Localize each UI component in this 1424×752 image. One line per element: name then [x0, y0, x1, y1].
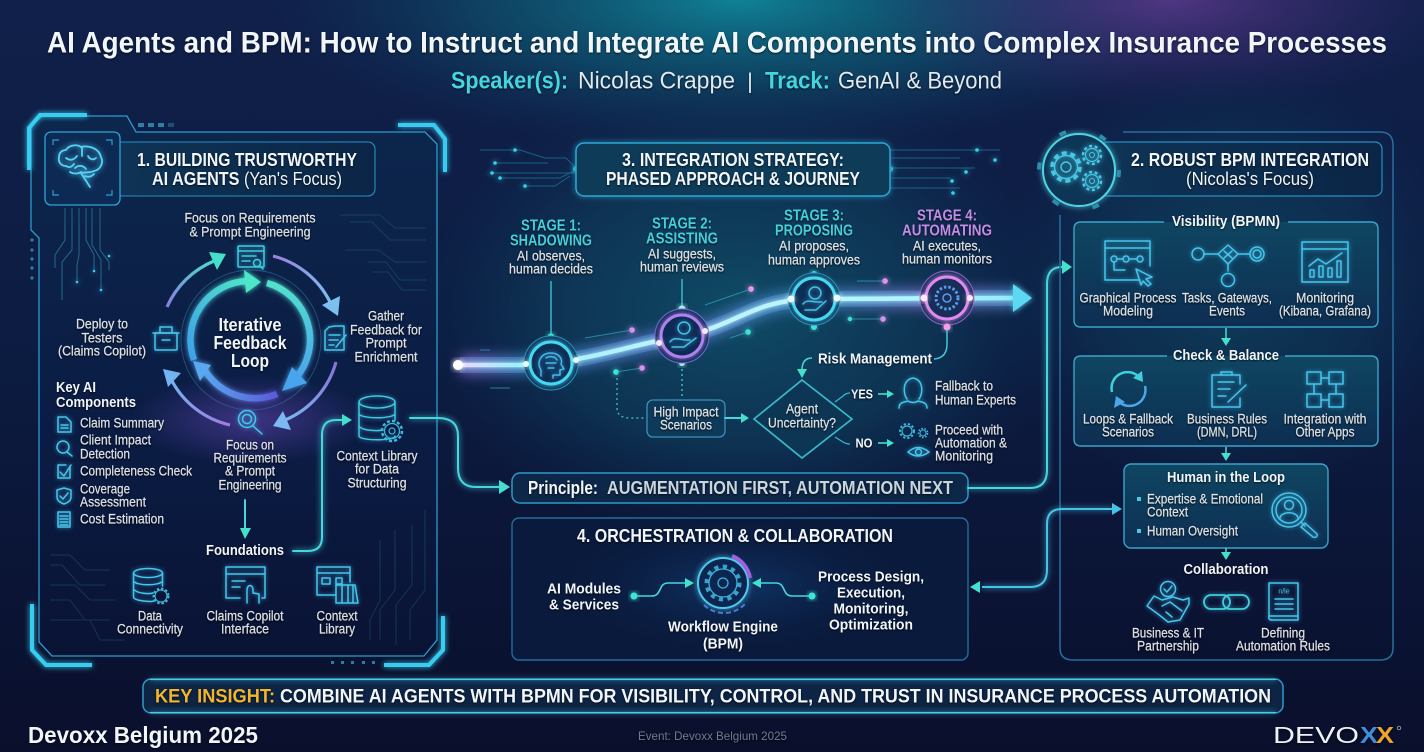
- stage 4: automating: AUTOMATING: [902, 222, 992, 240]
- text: graphical process modeling: Graphical Process: [1080, 290, 1177, 306]
- card: visibility BPMN: Visibility (BPMN): [1172, 214, 1280, 230]
- subtitle: speaker and track: Speaker(s):: [451, 68, 568, 94]
- card: check and balance: Check & Balance: [1173, 348, 1279, 364]
- panel 3 title box: PHASED APPROACH & JOURNEY: [606, 169, 860, 189]
- text: defining automation rules: [1236, 626, 1330, 654]
- text: tasks gateways events: [1182, 290, 1272, 318]
- item: coverage assessment: [57, 482, 146, 510]
- label: AI modules: & Services: [549, 596, 619, 614]
- text: loops: Scenarios: [1102, 424, 1154, 440]
- foundation: data connectivity: [117, 568, 183, 636]
- icon: gears: [1039, 130, 1119, 210]
- cycle step: focus on requirements bottom: [214, 410, 287, 492]
- panel 3: integration strategy: [453, 143, 1032, 464]
- panel 4: orchestration and collaboration: 4. ORCHESTRATION & COLLABORATION: [577, 526, 893, 546]
- cycle step: gather feedback: Feedback for: [350, 322, 422, 338]
- outer loop arrows: [163, 252, 340, 430]
- arrow: process design to engine: [752, 578, 816, 600]
- icon: rules book: n/le: [1278, 588, 1290, 596]
- foundation: data connectivity: Data: [138, 608, 162, 624]
- cycle step: focus on requirements top: & Prompt Engineering: [190, 224, 310, 240]
- label: iterative feedback loop: [214, 315, 287, 371]
- text: integration: Other Apps: [1296, 424, 1355, 440]
- arrow: human to collaboration: [1221, 548, 1231, 560]
- journey track arrow: [453, 278, 1032, 388]
- logo: Devoxx: X: [1376, 722, 1395, 748]
- cycle step: deploy to testers: Testers: [82, 330, 123, 346]
- cycle step: deploy to testers: (Claims Copilot): [58, 344, 146, 358]
- footer: conference name: Devoxx Belgium 2025: [28, 722, 258, 748]
- arrow: AI modules to engine: [630, 578, 694, 600]
- text: integration: Integration with: [1284, 412, 1366, 426]
- panel 2: robust BPM integration: [1039, 130, 1393, 660]
- card: human in the loop: Human in the Loop: [1167, 470, 1285, 486]
- text: defining automation rules: Defining: [1261, 626, 1305, 640]
- panel 3 title box: 3. INTEGRATION STRATEGY:: [622, 150, 844, 170]
- logo: Devoxx: DEVO: [1273, 722, 1359, 748]
- subtitle: speaker and track: Nicolas Crappe: [578, 68, 735, 94]
- foundation: context library: Library: [319, 622, 355, 636]
- icon: integration: [1307, 372, 1343, 407]
- high impact scenarios: [617, 373, 749, 437]
- cycle step: focus on requirements bottom: & Prompt: [225, 464, 275, 478]
- branch: no to automation: Monitoring: [935, 448, 993, 464]
- stage 4: automating: human monitors: [902, 252, 992, 266]
- icon: monitoring dashboard: [1302, 242, 1348, 282]
- label: process design: Process Design,: [818, 568, 924, 586]
- foundations: Foundations: [206, 543, 284, 559]
- decision: agent uncertainty: Agent: [786, 402, 818, 416]
- branch: yes to fallback: YES: [851, 386, 873, 402]
- key AI components list: Key AI: [56, 380, 96, 396]
- arrow: foundations to context library: [293, 414, 352, 551]
- foundation: context library: [316, 567, 358, 636]
- icon: process modeling: [1105, 241, 1152, 286]
- text: business and IT partnership: Business & IT: [1132, 626, 1204, 640]
- key insight banner: [143, 679, 1283, 713]
- panel 1: building trustworthy AI agents: [29, 115, 445, 665]
- foundations: [117, 543, 358, 636]
- decision: agent uncertainty: [754, 380, 852, 458]
- text: graphical process modeling: [1080, 290, 1177, 318]
- item: client impact detection: Client Impact: [80, 432, 151, 448]
- text: business rules: (DMN, DRL): [1197, 424, 1257, 440]
- stage 2: assisting: human reviews: [640, 260, 724, 274]
- stage 4: automating: STAGE 4:: [917, 208, 977, 224]
- icon: rules book: [1269, 583, 1298, 620]
- stage 1: shadowing: AI observes,: [517, 248, 585, 264]
- context library for data structuring: [336, 396, 418, 490]
- label: AI modules: AI Modules: [547, 580, 621, 598]
- cycle step: focus on requirements bottom: Requirements: [214, 450, 287, 466]
- label: process design: Monitoring,: [834, 600, 908, 618]
- icon: workflow engine gear: [698, 556, 750, 613]
- stage 2: assisting: [640, 216, 724, 396]
- text: graphical process modeling: Modeling: [1103, 304, 1153, 318]
- footer: event caption: Event: Devoxx Belgium 2025: [638, 729, 787, 743]
- panel 2 title box: (Nicolas's Focus): [1186, 169, 1314, 189]
- circuit decoration: [480, 148, 1000, 195]
- label: iterative feedback loop: Iterative: [218, 315, 282, 335]
- label: iterative feedback loop: Loop: [231, 351, 269, 371]
- branch: no to automation: [835, 422, 1007, 464]
- label: process design: Optimization: [829, 616, 913, 634]
- label: process design: Execution,: [837, 584, 905, 602]
- arrow: visibility to check: [1221, 328, 1231, 346]
- stage 1: shadowing: [509, 218, 593, 390]
- connector: principle to BPM visibility: [968, 260, 1072, 488]
- text: monitoring: Monitoring: [1296, 290, 1354, 306]
- stage 2: assisting: STAGE 2:: [652, 216, 712, 232]
- stage 3: proposing: [768, 208, 860, 330]
- item: client impact detection: Detection: [80, 446, 130, 462]
- logo: Devoxx: [1273, 722, 1401, 748]
- cycle step: focus on requirements top: Focus on Requirements: [184, 210, 316, 226]
- connector: context library to principle: [410, 418, 510, 494]
- subtitle: speaker and track: Track:: [765, 68, 830, 94]
- text: business and IT partnership: Partnership: [1137, 638, 1199, 654]
- label: workflow engine: Workflow Engine: [668, 618, 778, 636]
- card: human in the loop: Context: [1147, 504, 1188, 520]
- icon: tasks gateways events: [1192, 245, 1264, 286]
- item: claim summary: Claim Summary: [80, 416, 164, 430]
- principle banner: AUGMENTATION FIRST, AUTOMATION NEXT: [607, 478, 953, 498]
- principle banner: Principle:: [528, 478, 598, 498]
- panel 1 circuit decoration: [50, 208, 426, 645]
- key AI components list: [56, 380, 192, 527]
- item: coverage assessment: Coverage: [80, 482, 130, 496]
- item: completeness check: Completeness Check: [80, 464, 192, 478]
- foundation: claims copilot interface: Claims Copilot: [206, 608, 284, 624]
- text: loops: Loops & Fallback: [1083, 412, 1173, 426]
- branch: no to automation: Automation &: [935, 436, 1007, 450]
- branch: yes to fallback: Human Experts: [935, 392, 1016, 408]
- foundation: context library: Context: [316, 608, 358, 624]
- card: check and balance: [1074, 348, 1378, 446]
- stage 1: shadowing: STAGE 1:: [521, 218, 581, 234]
- stage 3: proposing: human approves: [768, 252, 860, 268]
- panel 2 title box: 2. ROBUST BPM INTEGRATION: [1131, 150, 1369, 170]
- cycle step: gather feedback: Enrichment: [354, 350, 418, 364]
- label: iterative feedback loop: Feedback: [214, 333, 287, 353]
- inner loop arrows: [190, 270, 310, 398]
- panel 1 title box: [115, 142, 375, 196]
- item: cost estimation: [58, 512, 164, 527]
- icon: magnifier person: [1272, 493, 1317, 537]
- cycle step: gather feedback: [325, 308, 422, 364]
- decision: agent uncertainty: Uncertainty?: [768, 416, 836, 430]
- foundation: claims copilot interface: [206, 567, 284, 636]
- arrow: down to foundations: [240, 500, 251, 539]
- high impact scenarios: Scenarios: [660, 418, 712, 432]
- stage 1: shadowing: SHADOWING: [510, 232, 592, 250]
- arrow: check to human: [1221, 447, 1231, 461]
- cycle step: deploy to testers: Deploy to: [76, 316, 128, 332]
- branch: yes to fallback: [835, 378, 1016, 408]
- icon: handshake: [1147, 582, 1189, 622]
- branch: no to automation: Proceed with: [935, 422, 1003, 438]
- key insight banner: KEY INSIGHT:: [155, 686, 275, 708]
- text: business rules: Business Rules: [1187, 412, 1267, 426]
- cycle step: focus on requirements bottom: Engineering: [218, 478, 282, 492]
- key insight banner: COMBINE AI AGENTS WITH BPMN FOR VISIBILITY, CONTROL, AND TRUST IN INSURANCE PROCESS AUTOMATION: [280, 686, 1271, 708]
- icon: clipboard rules: [1212, 372, 1246, 407]
- foundation: claims copilot interface: Interface: [221, 622, 269, 636]
- cycle step: deploy to testers: [58, 316, 179, 358]
- stage 2: assisting: AI suggests,: [648, 246, 716, 262]
- branch: no to automation: NO: [856, 436, 872, 450]
- high impact scenarios: High Impact: [654, 404, 719, 420]
- text: business rules: [1187, 412, 1267, 440]
- stage 4: automating: [902, 208, 992, 330]
- subtitle: speaker and track: GenAI & Beyond: [838, 68, 1002, 94]
- icon: link: [1204, 595, 1249, 609]
- risk management: [797, 330, 947, 378]
- stage 3: proposing: PROPOSING: [775, 222, 853, 240]
- risk management: Risk Management: [818, 350, 932, 368]
- card: human in the loop: Expertise & Emotional: [1147, 492, 1263, 506]
- logo: Devoxx: X: [1360, 722, 1379, 748]
- context library for data structuring: for Data: [355, 462, 399, 476]
- text: business and IT partnership: [1132, 626, 1204, 654]
- label: workflow engine: [668, 618, 778, 652]
- card: human in the loop: [1124, 464, 1328, 548]
- panel 3 title box: [576, 143, 890, 196]
- text: tasks gateways events: Tasks, Gateways,: [1182, 290, 1272, 306]
- stage 1: shadowing: human decides: [509, 262, 593, 276]
- foundation: data connectivity: Connectivity: [117, 622, 183, 636]
- text: tasks gateways events: Events: [1209, 304, 1245, 318]
- text: defining automation rules: Automation Rules: [1236, 638, 1330, 654]
- label: workflow engine: (BPM): [703, 636, 743, 652]
- label: AI modules: [547, 580, 621, 614]
- panel 1 title box: AI AGENTS (Yan's Focus): [152, 169, 342, 189]
- chart: iterative feedback loop cycle: [163, 252, 340, 430]
- icon: brain: [45, 132, 120, 205]
- stage 2: assisting: ASSISTING: [646, 230, 718, 248]
- context library for data structuring: Structuring: [348, 476, 406, 490]
- subtitle: speaker and track: |: [747, 68, 753, 94]
- card: human in the loop: Human Oversight: [1147, 524, 1238, 538]
- text: monitoring: (Kibana, Grafana): [1279, 304, 1371, 318]
- panel 4: orchestration and collaboration: [512, 513, 968, 660]
- branch: yes to fallback: Fallback to: [935, 378, 993, 394]
- cycle step: gather feedback: Gather: [368, 308, 404, 324]
- key AI components list: Components: [56, 395, 136, 411]
- panel 1 title box: 1. BUILDING TRUSTWORTHY: [137, 150, 357, 170]
- context library for data structuring: Context Library: [336, 448, 418, 464]
- item: cost estimation: Cost Estimation: [80, 512, 164, 526]
- stage 3: proposing: STAGE 3:: [784, 208, 844, 224]
- subtitle: speaker and track: [451, 68, 1002, 94]
- cycle step: focus on requirements top: [184, 210, 316, 269]
- principle banner: [512, 473, 968, 503]
- icon: loops: [1112, 371, 1145, 408]
- stage 4: automating: AI executes,: [913, 238, 981, 254]
- item: coverage assessment: Assessment: [80, 494, 146, 510]
- item: claim summary: [58, 416, 164, 432]
- cycle step: gather feedback: Prompt: [366, 336, 407, 350]
- panel 2 title box: [1100, 142, 1382, 196]
- stage 3: proposing: AI proposes,: [779, 238, 849, 254]
- text: loops: [1083, 412, 1173, 440]
- panel 1 frame: [29, 115, 445, 665]
- label: process design: [818, 568, 924, 634]
- card: visibility BPMN: [1074, 214, 1378, 327]
- text: monitoring: [1279, 290, 1371, 318]
- collaboration: [1132, 562, 1330, 654]
- item: client impact detection: [57, 432, 151, 462]
- collaboration: Collaboration: [1184, 562, 1268, 578]
- text: integration: [1284, 412, 1366, 440]
- connector: human in the loop to orchestration: [970, 503, 1122, 593]
- cycle step: focus on requirements bottom: Focus on: [226, 438, 274, 452]
